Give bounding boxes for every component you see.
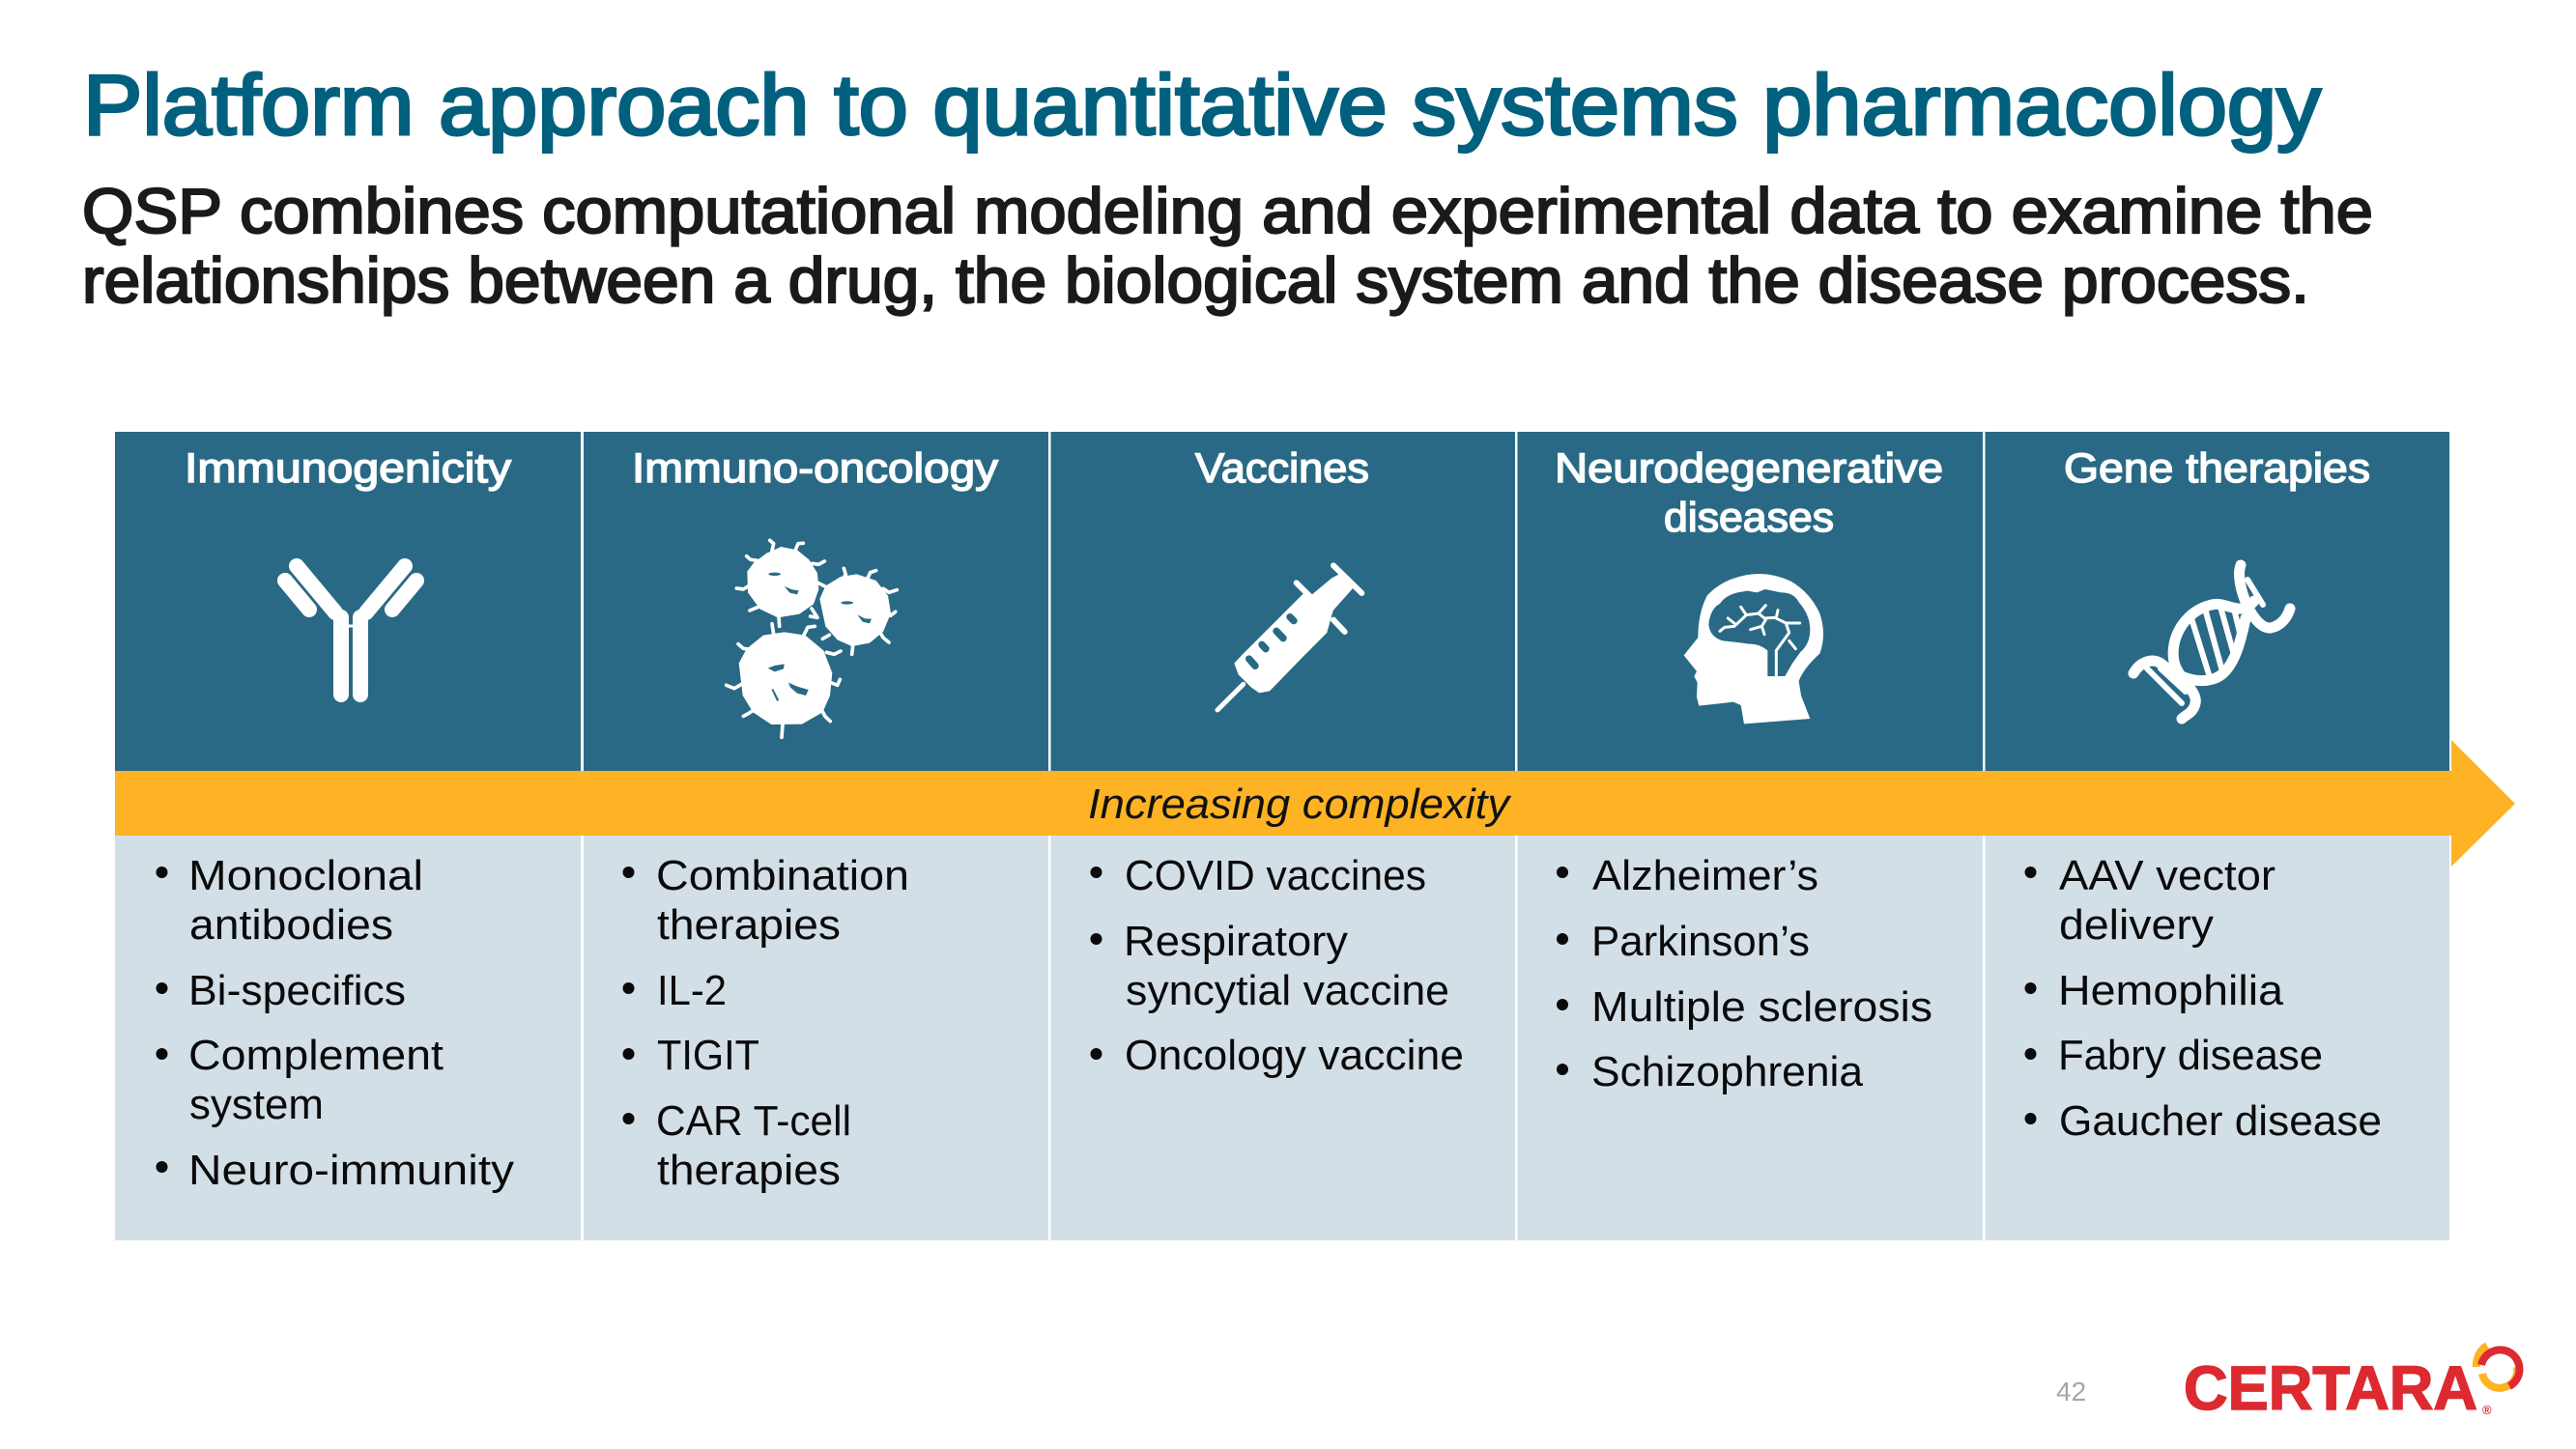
bullet list: Immunogenicity: system (189, 1081, 324, 1128)
icon: head with brain (1684, 574, 1823, 724)
bullet list: Immunogenicity: Neuro-immunity (188, 1147, 514, 1194)
heading: Immuno-oncology: Immuno-oncology (632, 445, 999, 492)
heading: Gene therapies: Gene therapies (2064, 445, 2370, 492)
title: Platform approach to quantitative systems pharmacology (83, 57, 2321, 153)
bullet list: Neurodegenerative diseases: Schizophrenia (1591, 1048, 1864, 1095)
arrow: increasing complexity (115, 740, 2515, 867)
bullet list: Neurodegenerative diseases (1557, 852, 1932, 1095)
bullet list: Immuno-oncology: therapies (657, 901, 841, 949)
arrow: increasing complexity: Increasing complexity (1088, 781, 1512, 828)
bullet list: Neurodegenerative diseases: Alzheimer’s (1592, 852, 1818, 899)
bullet list: Immuno-oncology: Combination (656, 852, 909, 899)
bullet list: Immuno-oncology: TIGIT (657, 1032, 759, 1079)
logo: Certara: ® (2482, 1403, 2492, 1417)
bullet list: Immunogenicity: antibodies (189, 901, 393, 949)
bullet list: Vaccines: COVID vaccines (1125, 852, 1426, 899)
bullet list: Vaccines (1090, 852, 1464, 1079)
bullet list: Vaccines: Respiratory (1124, 918, 1348, 965)
icon: DNA helix (2133, 565, 2290, 719)
bullet list: Immunogenicity (157, 852, 514, 1194)
subtitle: relationships between a drug, the biological system and the disease process. (82, 244, 2309, 316)
bullet list: Gene therapies: Hemophilia (2058, 967, 2284, 1014)
panel: Vaccines (1090, 445, 1464, 1079)
panel: Gene therapies (2025, 445, 2382, 1145)
bullet list: Neurodegenerative diseases: Parkinson’s (1591, 918, 1810, 965)
bullet list: Immuno-oncology: therapies (657, 1147, 841, 1194)
bullet list: Gene therapies: delivery (2059, 901, 2214, 949)
bullet list: Immuno-oncology (622, 852, 909, 1194)
bullet list: Gene therapies (2025, 852, 2382, 1145)
bullet list: Gene therapies: Fabry disease (2058, 1032, 2323, 1079)
heading: Vaccines: Vaccines (1195, 445, 1369, 492)
bullet list: Gene therapies: Gaucher disease (2059, 1097, 2382, 1145)
bullet list: Immunogenicity: Monoclonal (188, 852, 423, 899)
panel: header background (115, 432, 2449, 771)
logo: Certara: CERTARA (2184, 1353, 2477, 1423)
heading: Immunogenicity: Immunogenicity (185, 445, 512, 492)
page number: 42 (2056, 1377, 2086, 1406)
icon: antibody (285, 566, 416, 695)
subtitle (82, 175, 2373, 316)
bullet list: Vaccines: Oncology vaccine (1125, 1032, 1464, 1079)
heading: Neurodegenerative diseases (1555, 445, 1943, 541)
panel: Immunogenicity (157, 445, 514, 1194)
heading: Neurodegenerative diseases: diseases (1664, 495, 1834, 541)
icon: cells (727, 540, 897, 737)
bullet list: Immuno-oncology: CAR T-cell (656, 1097, 851, 1145)
bullet list: Gene therapies: AAV vector (2059, 852, 2275, 899)
icon: syringe (1217, 565, 1361, 710)
heading: Neurodegenerative diseases: Neurodegenerative (1555, 445, 1943, 492)
subtitle: QSP combines computational modeling and experimental data to examine the (82, 175, 2373, 246)
bullet list: Immunogenicity: Complement (188, 1032, 444, 1079)
bullet list: Immuno-oncology: IL-2 (657, 967, 727, 1014)
bullet list: Immunogenicity: Bi-specifics (188, 967, 406, 1014)
bullet list: Vaccines: syncytial vaccine (1126, 967, 1449, 1014)
bullet list: Neurodegenerative diseases: Multiple sclerosis (1591, 983, 1932, 1031)
panel: light body background (115, 836, 2449, 1240)
panel: Immuno-oncology (622, 445, 999, 1194)
panel: Neurodegenerative diseases (1555, 445, 1943, 1095)
